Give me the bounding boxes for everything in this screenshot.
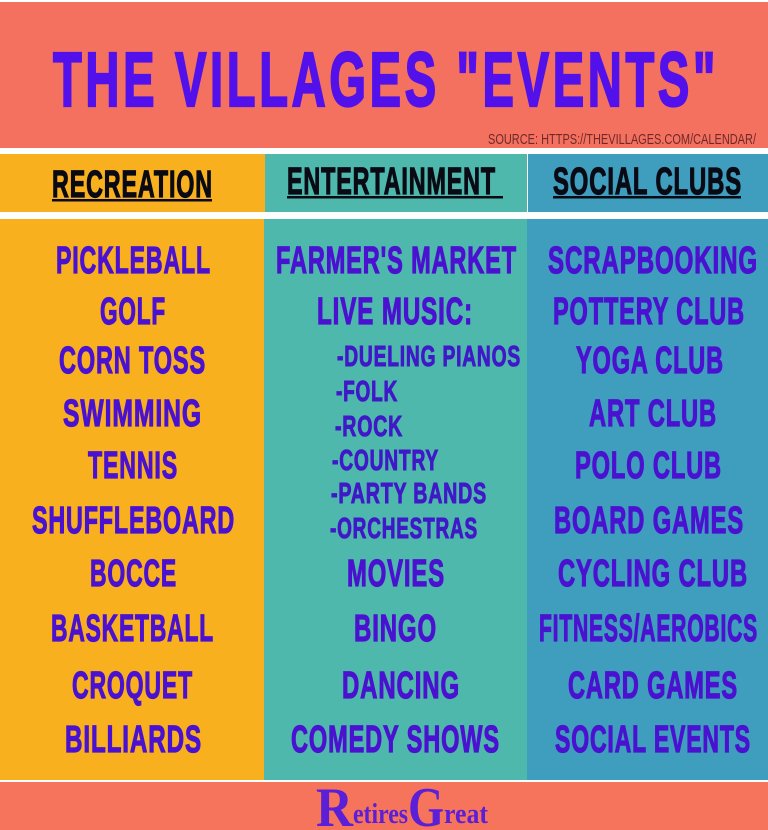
panel: recreation list: SWIMMING — [63, 393, 202, 435]
panel: recreation list: BOCCE — [90, 553, 177, 595]
panel: recreation list: PICKLEBALL — [56, 240, 211, 282]
panel: social clubs header — [528, 154, 768, 212]
panel: entertainment list: FARMER'S MARKET — [276, 240, 517, 282]
title banner — [0, 2, 768, 148]
heading: recreation: RECREATION — [52, 164, 213, 206]
panel: recreation list: CROQUET — [72, 665, 193, 707]
live music sub-list: -PARTY BANDS — [331, 478, 487, 510]
panel: recreation list: SHUFFLEBOARD — [32, 500, 235, 542]
live music sub-list: -DUELING PIANOS — [337, 341, 521, 373]
panel: social clubs list — [527, 219, 768, 780]
panel: entertainment list: COMEDY SHOWS — [291, 719, 500, 761]
panel: recreation list: BASKETBALL — [51, 608, 214, 650]
footer band — [0, 777, 768, 830]
panel: entertainment header — [265, 154, 527, 212]
panel: entertainment list: LIVE MUSIC: — [317, 291, 473, 333]
live music sub-list — [330, 341, 521, 545]
panel: recreation list: TENNIS — [88, 445, 178, 487]
panel: entertainment list: MOVIES — [347, 553, 445, 595]
panel: recreation header — [0, 154, 265, 212]
panel: recreation list: CORN TOSS — [59, 340, 206, 382]
live music sub-list: -COUNTRY — [332, 445, 439, 477]
panel: recreation list: GOLF — [100, 291, 166, 333]
live music sub-list: -FOLK — [336, 376, 398, 408]
panel: recreation list: BILLIARDS — [65, 719, 202, 761]
panel: recreation list — [0, 219, 264, 780]
logo: RetiresGreat: etires — [353, 798, 408, 830]
panel: entertainment list: DANCING — [342, 665, 460, 707]
live music sub-list: -ROCK — [335, 411, 403, 443]
logo: RetiresGreat: reat — [444, 798, 488, 830]
logo: RetiresGreat — [316, 777, 488, 830]
live music sub-list: -ORCHESTRAS — [330, 513, 478, 545]
heading: entertainment: ENTERTAINMENT — [287, 161, 496, 203]
panel: entertainment list — [264, 219, 527, 780]
panel: entertainment list: BINGO — [354, 608, 437, 650]
